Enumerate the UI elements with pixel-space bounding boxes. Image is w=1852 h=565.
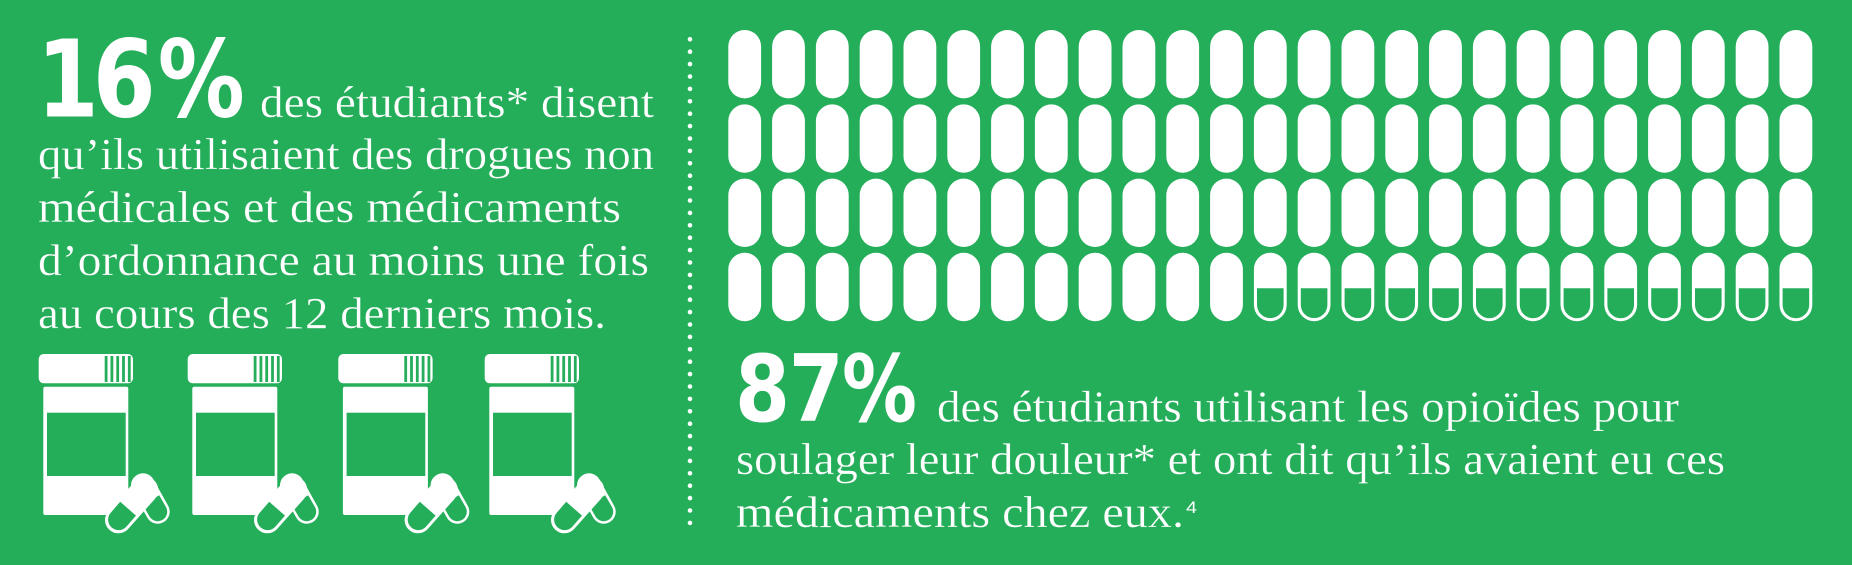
- number: 87%: %: [842, 335, 917, 443]
- icon: medicine bottle 1: [39, 354, 167, 530]
- number: 87%: [735, 335, 917, 443]
- icon: medicine bottle 2: [188, 354, 316, 530]
- description text: 87%: [736, 382, 1725, 537]
- description text: 87%: des étudiants utilisant les opioïdes pour: [937, 382, 1679, 432]
- capsule row 2: [728, 104, 1812, 173]
- number: 16%: [37, 19, 245, 143]
- number: 87%: 7: [789, 335, 844, 443]
- capsule row 3: [728, 179, 1812, 247]
- description text: 16%: qu’ils utilisaient des drogues non: [38, 130, 654, 179]
- dotted divider: [688, 39, 692, 535]
- text block: 87% statistic: [735, 335, 1725, 537]
- number: 16%: %: [158, 19, 245, 143]
- icon: medicine bottle 3: [338, 354, 467, 530]
- number: 16%: 1: [37, 19, 99, 143]
- description text: 87%: médicaments chez eux.: [736, 488, 1184, 537]
- description text: 16%: d’ordonnance au moins une fois: [38, 236, 649, 285]
- description text: 87%: 4: [1186, 498, 1197, 517]
- capsule row 4: 12 full and 13 half-filled: [728, 253, 1812, 321]
- description text: 16%: [38, 78, 654, 338]
- icon row: medicine bottles: [39, 354, 613, 530]
- capsule row 1: [728, 30, 1812, 98]
- icon: medicine bottle 4: [485, 354, 613, 530]
- number: 87%: 8: [735, 335, 790, 443]
- text block: 16% statistic: [37, 19, 654, 338]
- description text: 16%: au cours des 12 derniers mois.: [38, 289, 606, 338]
- description text: 87%: soulager leur douleur* et ont dit qu’ils avaient eu ces: [736, 435, 1725, 484]
- description text: 16%: médicales et des médicaments: [38, 183, 621, 232]
- description text: 16%: des étudiants* disent: [260, 78, 654, 127]
- pictogram chart: 87 of 100 capsules filled: [728, 30, 1812, 321]
- number: 16%: 6: [93, 19, 156, 143]
